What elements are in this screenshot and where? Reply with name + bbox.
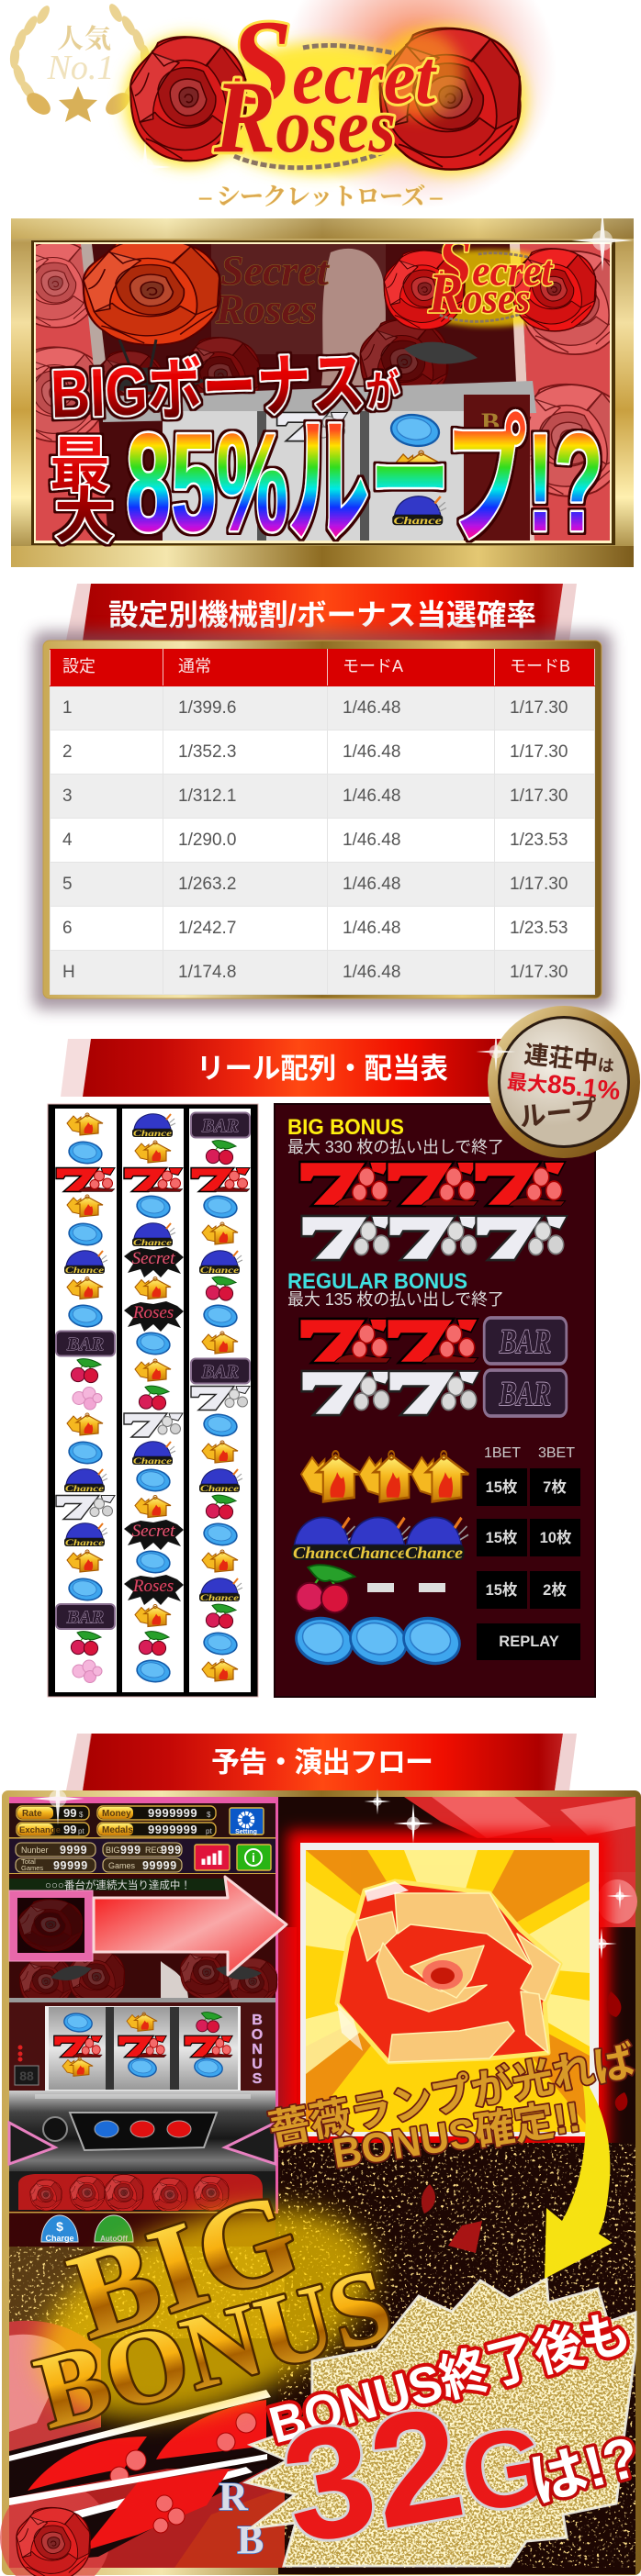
panel: flow frame <box>0 1772 641 2576</box>
reels on machine: N <box>252 2042 263 2057</box>
logo: Secret Roses <box>118 0 557 209</box>
text: rose lamp: 薔薇ランプが光れば <box>264 2037 639 2154</box>
table frame <box>33 631 612 1009</box>
settings table: 1/23.53 <box>510 830 568 850</box>
popularity label: 人気 <box>57 24 112 54</box>
settings table: 1/23.53 <box>510 918 568 938</box>
settings table: 1/174.8 <box>178 962 236 982</box>
machine: top status panel: pt <box>206 1827 212 1835</box>
regular bonus note: 最大 135 枚の払い出しで終了 <box>287 1290 504 1309</box>
payout table: 1BET <box>484 1445 521 1461</box>
payout table: 15枚 <box>486 1580 518 1599</box>
machine: marquee and artwork <box>9 1874 277 2008</box>
arrow: red to rose <box>94 1877 287 1975</box>
big bonus logo: BIG <box>55 2165 313 2366</box>
settings table: 6 <box>62 918 73 938</box>
glowing rose window <box>300 1843 599 2136</box>
lower left glitter background <box>0 2247 285 2576</box>
payout table: REPLAY <box>499 1634 559 1650</box>
machine: top status panel: Nunber <box>21 1846 49 1855</box>
machine: top status panel: Exchange <box>19 1825 61 1835</box>
payout table: 15枚 <box>486 1528 518 1546</box>
badge: loop rate: ループ <box>518 1095 599 1132</box>
machine: top status panel: Rate <box>22 1809 42 1819</box>
payout table <box>477 1445 580 1660</box>
section heading: reels and payouts: リール配列・配当表 <box>197 1053 448 1085</box>
settings table: 1/352.3 <box>178 742 236 762</box>
settings table: 1/46.48 <box>343 918 400 938</box>
settings table: モードB <box>510 657 570 675</box>
settings table: H <box>62 962 75 982</box>
section heading: notice flow <box>66 1734 577 1790</box>
cherry combination icons <box>297 1565 445 1612</box>
section heading: notice flow: 予告・演出フロー <box>211 1746 433 1779</box>
settings table: 1/46.48 <box>343 830 400 850</box>
text: 32G: 32G <box>271 2359 557 2576</box>
panel: payouts <box>275 1104 595 1697</box>
payout table: 2枚 <box>543 1580 567 1599</box>
settings table: 1/17.30 <box>510 742 568 762</box>
machine: rose strip and buttons: AutoOff <box>100 2235 128 2243</box>
settings table: 1/46.48 <box>343 874 400 894</box>
banner gold frame <box>11 218 634 567</box>
machine: top status panel: 99999 <box>142 1859 177 1872</box>
section heading: settings table: 設定別機械割/ボーナス当選確率 <box>108 598 536 631</box>
machine: top status panel: $ <box>79 1811 84 1819</box>
settings table: 1/46.48 <box>343 697 400 718</box>
machine: top status panel: 999 <box>120 1844 141 1857</box>
reels on machine: B <box>252 2013 263 2028</box>
lower left red seven strips <box>9 2386 276 2576</box>
reel 1 symbols <box>56 1113 115 1683</box>
big bonus note: 最大 330 枚の払い出しで終了 <box>287 1138 504 1156</box>
settings table: 1/17.30 <box>510 962 568 982</box>
settings table: 1/263.2 <box>178 874 236 894</box>
banner headline: BIG bonus: BIGボーナスが <box>50 344 400 432</box>
right background: ribbons <box>278 1789 637 2164</box>
yellow arrow <box>545 2074 613 2279</box>
lower left red seven strips: R <box>219 2474 249 2519</box>
header badge: popularity No.1 laurel <box>9 2 151 122</box>
reels on machine: O <box>252 2027 263 2043</box>
lower left red seven strips: B <box>237 2517 264 2562</box>
machine: rose strip and buttons <box>9 2171 276 2247</box>
machine: rose strip and buttons: $ <box>56 2219 63 2234</box>
main banner <box>9 209 634 567</box>
machine: top status panel: 9999999 <box>148 1823 197 1836</box>
machine: buttons panel <box>9 2091 276 2178</box>
machine: top status panel: 99999 <box>53 1859 88 1872</box>
settings table <box>50 649 639 1153</box>
machine: top status panel: Games <box>21 1864 43 1872</box>
settings table: モードA <box>343 657 403 675</box>
badge: loop rate: 連荘中は <box>523 1041 616 1077</box>
machine: top status panel: Total <box>21 1857 36 1866</box>
regular bonus combinations <box>299 1318 567 1416</box>
settings table: 1/46.48 <box>343 786 400 806</box>
machine: top status panel: 9999 <box>60 1844 87 1857</box>
machine: top status panel: i <box>252 1850 255 1865</box>
machine: rose strip and buttons: Charge <box>45 2234 74 2243</box>
section heading: reels and payouts <box>61 1039 514 1097</box>
banner headline: max: 大 <box>54 482 115 550</box>
settings table: 4 <box>62 830 73 850</box>
settings table: 1 <box>62 697 73 718</box>
replay combination icons <box>294 1614 462 1667</box>
reels on machine: U <box>252 2057 263 2072</box>
reels on machine: 88 <box>19 2069 34 2083</box>
machine: top status panel: 99 <box>63 1823 76 1836</box>
payout table: 7枚 <box>543 1478 567 1496</box>
big bonus logo <box>11 2165 403 2459</box>
banner artwork: Roses <box>215 285 317 332</box>
machine: lamp box <box>9 1890 93 1961</box>
banner artwork: Secret <box>220 247 330 294</box>
machine: top status panel: BIG <box>106 1846 120 1855</box>
banner headline: max: 最 <box>50 431 110 499</box>
machine: top status panel: 999 <box>161 1844 182 1857</box>
payout table: 10枚 <box>540 1528 572 1546</box>
machine: top status panel: $ <box>207 1811 211 1819</box>
machine: top status panel: 9999999 <box>148 1806 197 1820</box>
settings table: 3 <box>62 786 73 806</box>
machine: top status panel: Money <box>102 1809 131 1819</box>
settings table: 5 <box>62 874 73 894</box>
No.1 label: No.1 <box>47 49 114 87</box>
text: bonus confirmed: BONUS確定!! <box>330 2093 583 2177</box>
machine: top status panel: Medals <box>102 1825 133 1835</box>
big bonus combinations <box>299 1162 568 1260</box>
reels on machine <box>9 1998 276 2092</box>
settings table: 1/17.30 <box>510 874 568 894</box>
machine: top status panel <box>9 1797 278 2214</box>
settings table: 通常 <box>178 657 211 675</box>
settings table: 1/242.7 <box>178 918 236 938</box>
reel 3 symbols <box>191 1112 250 1681</box>
badge: loop rate <box>476 1006 640 1158</box>
gold burst <box>246 2279 635 2566</box>
regular bonus heading: REGULAR BONUS <box>287 1269 467 1294</box>
settings table: 2 <box>62 742 73 762</box>
settings table: 1/290.0 <box>178 830 236 850</box>
machine: top status panel: Games <box>108 1861 136 1870</box>
settings table: 1/46.48 <box>343 962 400 982</box>
panel: reel strips <box>48 1104 258 1697</box>
logo subtitle katakana: – シークレットローズ – <box>198 184 443 210</box>
settings table: 1/17.30 <box>510 786 568 806</box>
badge: loop rate: 最大85.1% <box>506 1065 622 1105</box>
settings table: 1/46.48 <box>343 742 400 762</box>
machine: top status panel: pt <box>78 1827 84 1835</box>
chance combination icons <box>292 1517 468 1563</box>
machine: marquee and artwork: ○○○番台が連続大当り達成中！ <box>45 1879 191 1891</box>
payout table: 3BET <box>538 1445 575 1461</box>
settings table: 1/17.30 <box>510 697 568 718</box>
settings table: 1/312.1 <box>178 786 236 806</box>
section heading: settings table <box>66 584 577 641</box>
star <box>59 86 97 122</box>
settings table: 1/399.6 <box>178 697 236 718</box>
reel 2 symbols <box>124 1114 184 1684</box>
machine: top status panel: 99 <box>63 1806 76 1820</box>
machine: top status panel: REG <box>145 1846 163 1855</box>
banner artwork: B <box>481 407 500 438</box>
machine: top status panel: Setting <box>235 1829 257 1835</box>
big bonus logo: BONUS <box>24 2245 403 2451</box>
bell combination icons <box>301 1451 468 1501</box>
banner artwork <box>36 235 610 541</box>
payout table: 15枚 <box>486 1478 518 1496</box>
dark glitter field <box>278 2143 635 2574</box>
settings table: 設定 <box>62 657 96 675</box>
reels on machine: S <box>253 2071 263 2087</box>
big bonus heading: BIG BONUS <box>287 1115 404 1140</box>
